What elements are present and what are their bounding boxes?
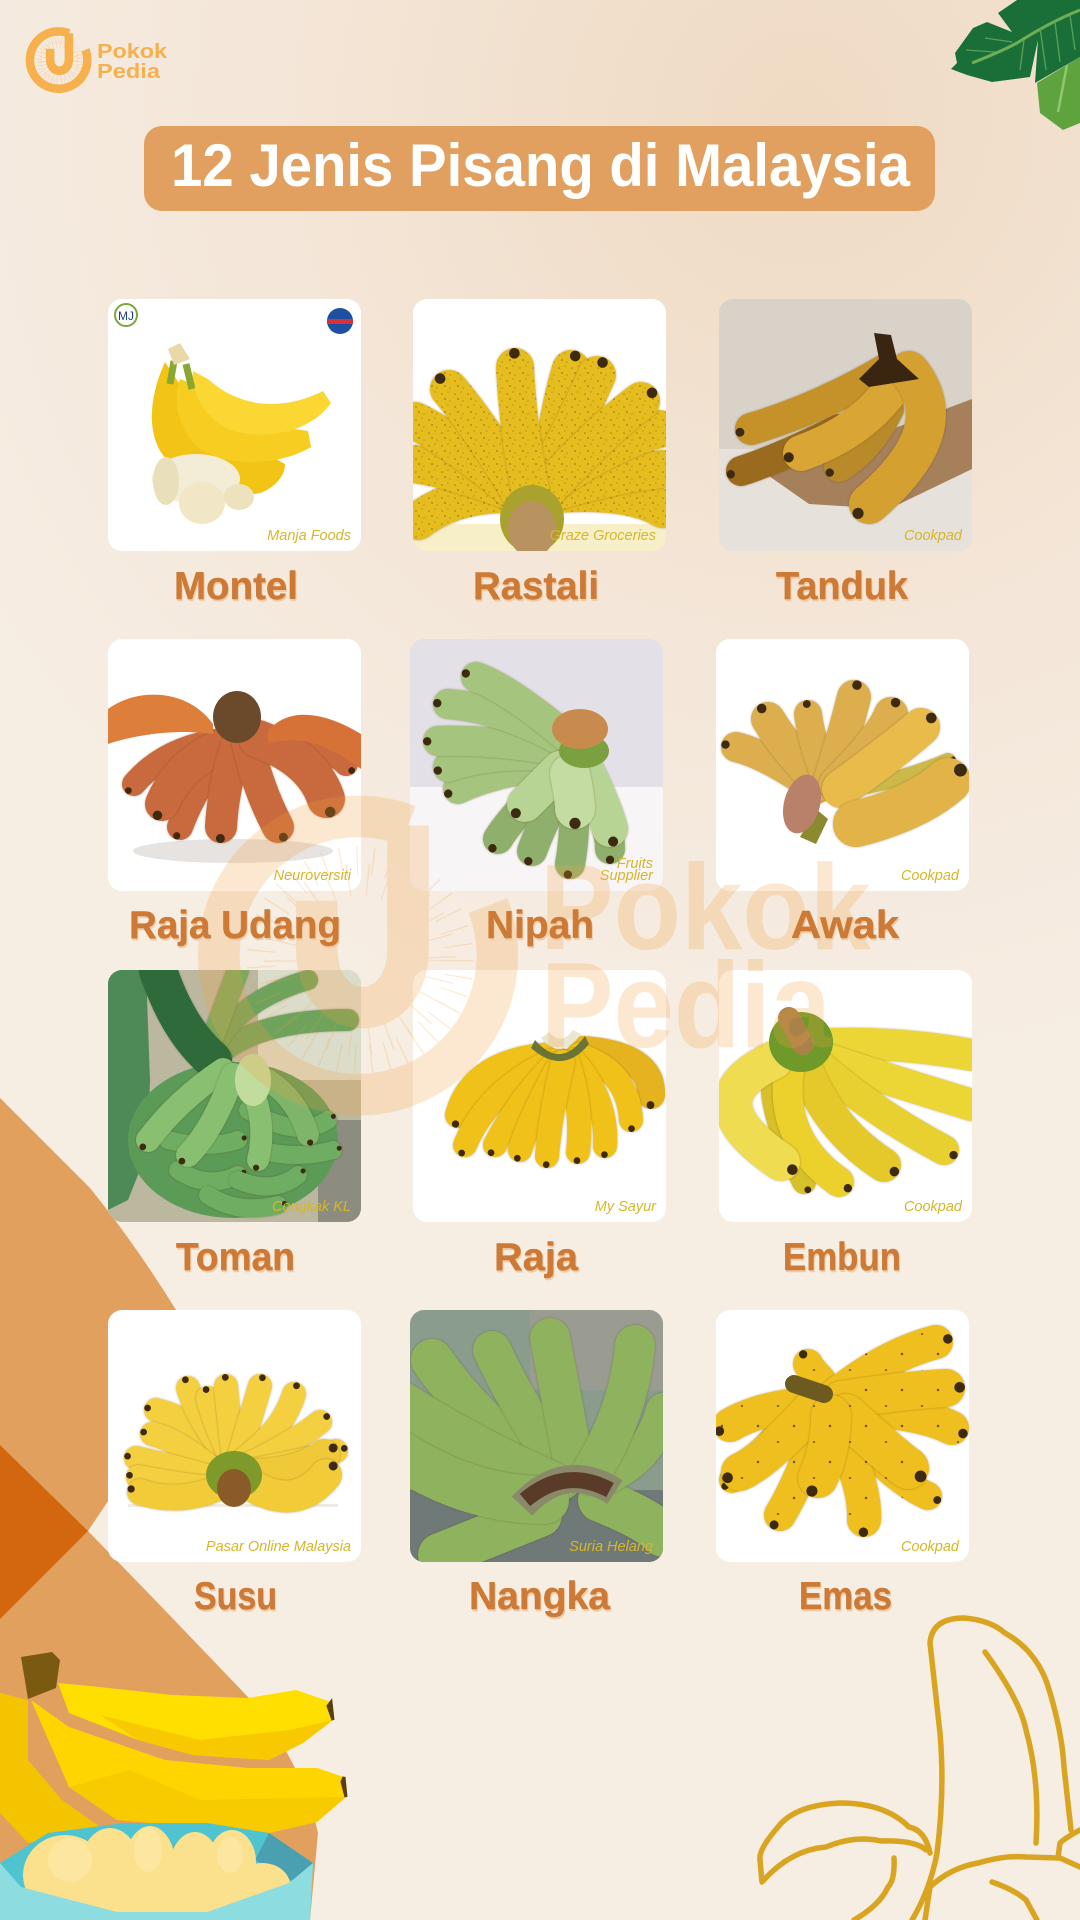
logo bbox=[30, 31, 168, 89]
logo: Pedia bbox=[97, 61, 161, 83]
panel: Toman bbox=[108, 970, 361, 1222]
panel: Embun bbox=[719, 970, 972, 1222]
label: Susu: Susu bbox=[194, 1575, 277, 1618]
panel: Montel: Manja Foods bbox=[267, 528, 351, 544]
icon: top right banana leaves bbox=[951, 0, 1080, 130]
panel: Tanduk bbox=[719, 299, 972, 551]
panel: Nipah: Fruits bbox=[617, 856, 653, 872]
panel: Nangka: Suria Helang bbox=[569, 1539, 653, 1555]
panel: Montel bbox=[108, 299, 361, 551]
panel: Nangka bbox=[400, 1310, 663, 1562]
label: Raja Udang: Raja Udang bbox=[129, 904, 341, 947]
watermark logo: Pedia bbox=[541, 937, 832, 1073]
panel: Susu: Pasar Online Malaysia bbox=[206, 1539, 351, 1555]
label: Awak: Awak bbox=[791, 904, 899, 947]
panel: Embun: Cookpad bbox=[904, 1199, 963, 1215]
label: Embun: Embun bbox=[783, 1236, 901, 1279]
illustration: peeled banana outline bbox=[760, 1618, 1080, 1920]
label: Montel: Montel bbox=[174, 565, 298, 608]
label: Toman: Toman bbox=[176, 1236, 295, 1279]
panel: Toman: Congkak KL bbox=[272, 1199, 351, 1215]
label: Rastali: Rastali bbox=[473, 565, 599, 608]
label: Emas: Emas bbox=[799, 1575, 892, 1618]
panel: Emas: Cookpad bbox=[901, 1539, 960, 1555]
panel: Nipah: Supplier bbox=[600, 868, 654, 884]
label: Raja: Raja bbox=[494, 1236, 578, 1279]
panel: Raja Udang: Neuroversiti bbox=[274, 868, 352, 884]
panel: Nipah bbox=[410, 639, 663, 891]
watermark logo: Pokok bbox=[540, 839, 871, 975]
title: 12 Jenis Pisang di Malaysia bbox=[171, 132, 911, 199]
panel: Emas bbox=[716, 1310, 969, 1562]
decorative orange shape bbox=[0, 1098, 318, 1920]
panel: Awak: Cookpad bbox=[901, 868, 960, 884]
panel: Raja Udang bbox=[108, 639, 361, 891]
panel: Montel: MJ bbox=[118, 309, 134, 323]
panel: Rastali bbox=[413, 299, 666, 557]
panel: Rastali: Graze Groceries bbox=[550, 528, 656, 544]
illustration: bananas and bowl bbox=[0, 1652, 346, 1920]
panel: Awak bbox=[716, 639, 969, 891]
panel: Susu bbox=[108, 1310, 361, 1562]
panel: Raja: My Sayur bbox=[595, 1199, 657, 1215]
logo: Pokok bbox=[97, 41, 168, 63]
label: Nangka: Nangka bbox=[469, 1575, 610, 1618]
label: Nipah: Nipah bbox=[486, 904, 594, 947]
watermark logo bbox=[219, 816, 871, 1095]
panel: Tanduk: Cookpad bbox=[904, 528, 963, 544]
label: Tanduk: Tanduk bbox=[776, 565, 908, 608]
panel: Raja bbox=[413, 970, 666, 1222]
